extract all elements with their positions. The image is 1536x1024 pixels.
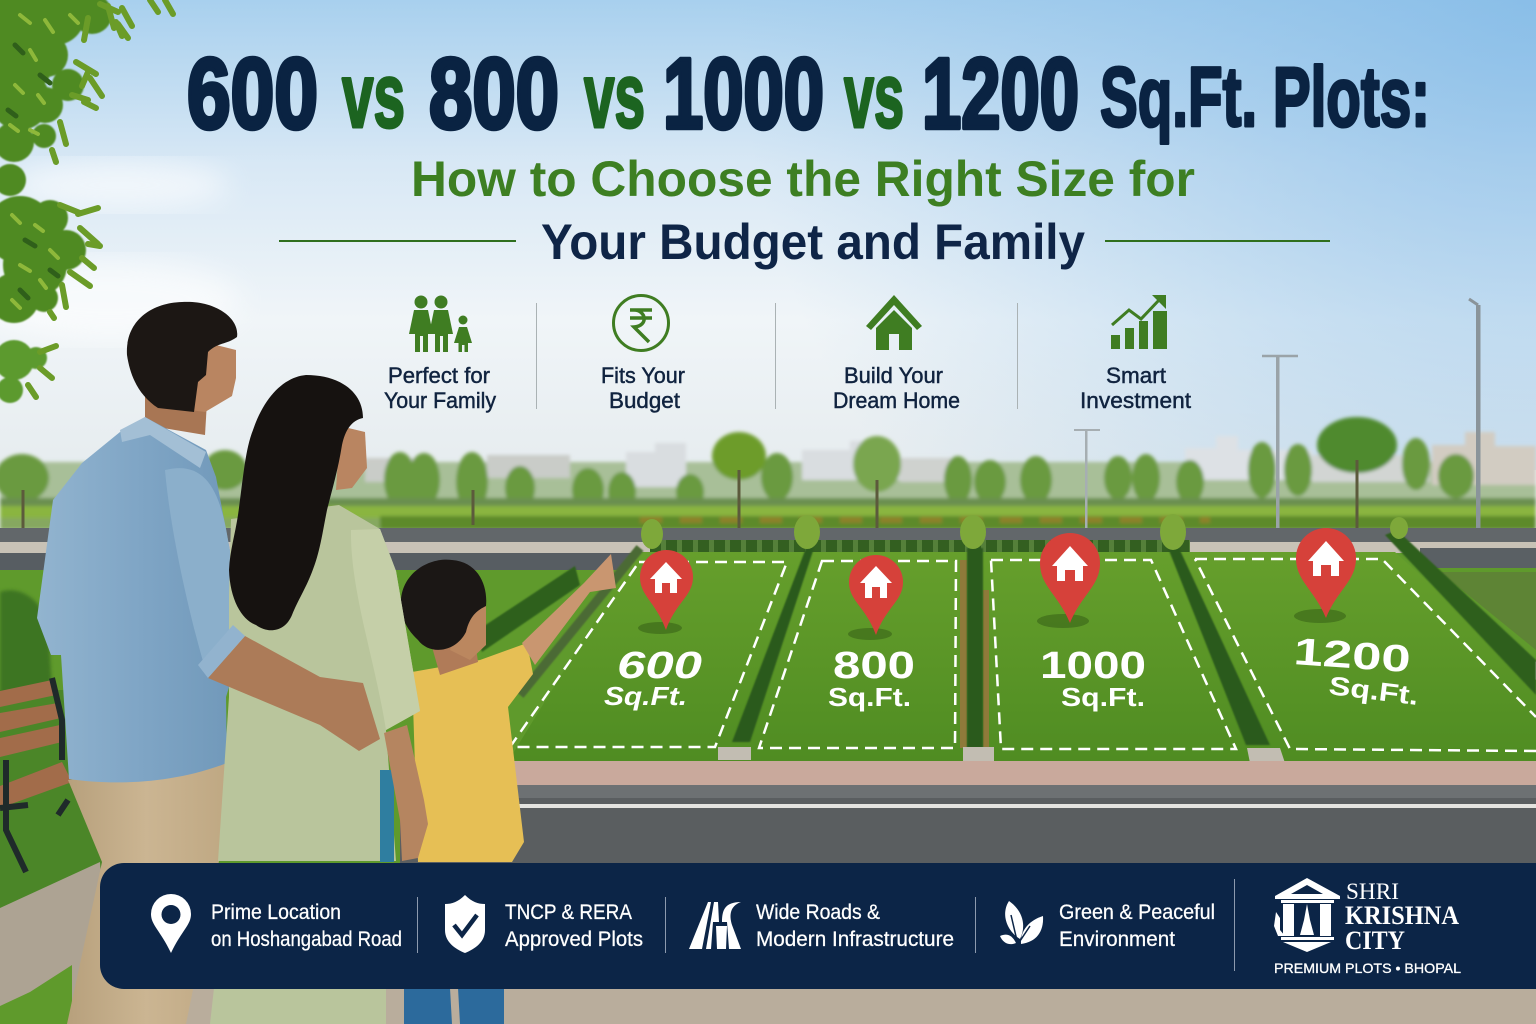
pin 600 <box>638 550 693 634</box>
text: Prime Location <box>211 901 341 924</box>
icon: house <box>866 295 922 350</box>
title: vs <box>342 45 405 147</box>
text <box>384 363 496 413</box>
title: vs <box>844 45 904 147</box>
text: Budget <box>609 388 680 413</box>
plot 1200 <box>1195 528 1536 751</box>
text <box>601 363 685 413</box>
label 600: 600 <box>617 645 702 687</box>
plot 800 <box>759 555 956 748</box>
subtitle second line with rules: Your Budget and Family <box>541 214 1085 270</box>
pin 800 <box>848 555 903 640</box>
environment item <box>1000 901 1215 951</box>
text: TNCP & RERA <box>505 901 632 924</box>
man's rolled sleeve cuff <box>198 625 245 678</box>
text: Dream Home <box>833 388 960 413</box>
man <box>37 302 245 1024</box>
label 600 unit: Sq.Ft. <box>604 681 687 711</box>
back hedge row <box>650 540 1190 552</box>
bottom information bar <box>100 863 1536 989</box>
text: Investment <box>1080 388 1191 413</box>
approvals item <box>445 895 643 953</box>
text <box>833 363 960 413</box>
plot 1000 <box>991 533 1236 749</box>
location item <box>151 894 402 953</box>
icon: family <box>409 296 472 352</box>
logo wordmark: SHRI <box>1346 879 1399 904</box>
title: 1200 <box>922 38 1079 150</box>
text <box>756 901 954 951</box>
label 1000 unit: Sq.Ft. <box>1061 682 1145 712</box>
text: Modern Infrastructure <box>756 928 954 951</box>
label 1200 unit: Sq.Ft. <box>1327 670 1420 711</box>
ground behind plots <box>0 528 1536 870</box>
bush <box>0 590 52 700</box>
label 1200: 1200 <box>1292 631 1412 681</box>
plot 600 <box>510 550 787 747</box>
logo emblem <box>1274 878 1340 952</box>
text <box>1059 901 1215 951</box>
icon: leaves <box>1000 901 1043 950</box>
text: Wide Roads & <box>756 901 880 924</box>
bench <box>0 678 72 872</box>
sky background <box>0 0 1536 470</box>
text: Approved Plots <box>505 928 643 951</box>
paved footpath, curb and road <box>400 761 1536 868</box>
pin 1200 <box>1294 528 1356 623</box>
title: 600 <box>187 38 318 150</box>
tree trunks and street lights <box>23 299 1480 542</box>
feature row dividers <box>536 303 1018 409</box>
tree top-left <box>0 0 173 403</box>
icon: rupee coin <box>614 296 668 350</box>
subtitle: How to Choose the Right Size for <box>411 151 1195 207</box>
distant skyline and tree line <box>0 417 1536 530</box>
label 1000: 1000 <box>1040 645 1146 687</box>
icon: shield check <box>445 895 485 953</box>
grass base for the four plots <box>507 552 1536 763</box>
logo wordmark: CITY <box>1345 926 1405 955</box>
title: 800 <box>429 38 559 150</box>
text: Green & Peaceful <box>1059 901 1215 924</box>
icon: road <box>689 902 741 949</box>
pin 1000 <box>1037 533 1100 628</box>
feature: fits your budget <box>601 296 685 413</box>
foreground lawn and paving <box>0 690 1536 1024</box>
text: on Hoshangabad Road <box>211 928 402 951</box>
title: vs <box>584 45 645 147</box>
logo wordmark <box>1345 879 1459 955</box>
text: Perfect for <box>388 363 490 388</box>
logo wordmark: KRISHNA <box>1345 901 1459 930</box>
label 800: 800 <box>833 645 915 687</box>
label 800 unit: Sq.Ft. <box>828 682 911 712</box>
roads item <box>689 901 954 951</box>
plot dividers: hedges and paths <box>641 514 1536 763</box>
title <box>187 38 1430 150</box>
text: Fits Your <box>601 363 685 388</box>
text: Your Family <box>384 388 496 413</box>
feature: perfect for your family <box>384 296 496 413</box>
family looking at the plots <box>37 302 616 1024</box>
fence hedge along plot 600 <box>520 548 640 695</box>
title: 1000 <box>663 38 824 150</box>
text: Environment <box>1059 928 1175 951</box>
feature: build your dream home <box>833 295 960 413</box>
woman <box>210 375 428 1024</box>
text: Build Your <box>844 363 943 388</box>
boy <box>401 554 616 1024</box>
logo tagline: PREMIUM PLOTS • BHOPAL <box>1274 960 1461 976</box>
text <box>211 901 402 951</box>
feature: smart investment <box>1080 295 1191 413</box>
text <box>505 901 643 951</box>
text: Smart <box>1106 363 1166 388</box>
man's arm around woman <box>208 636 380 751</box>
icon: location pin <box>151 894 191 953</box>
left hedge <box>475 566 580 652</box>
text <box>1080 363 1191 413</box>
icon: growth chart <box>1111 295 1167 349</box>
brand logo <box>1274 878 1461 976</box>
